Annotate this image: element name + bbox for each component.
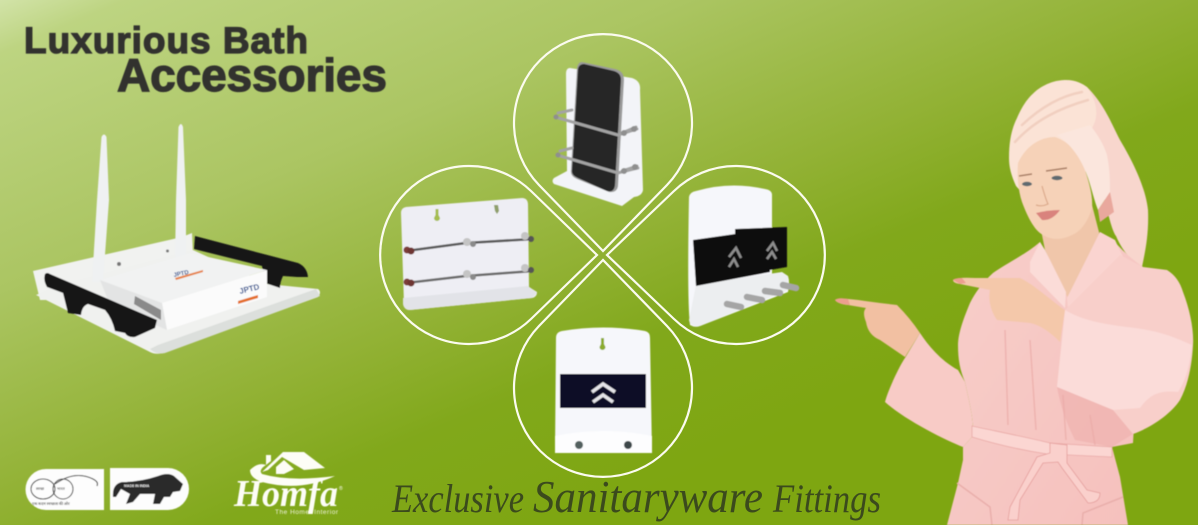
tray front lip shadow — [150, 289, 320, 354]
left black bracket — [44, 273, 157, 337]
word: Fittings: Fittings — [772, 476, 881, 521]
towel folds — [1015, 92, 1088, 142]
lower rail — [406, 271, 533, 283]
eye left — [1022, 182, 1032, 186]
slogan: Exclusive Sanitaryware Fittings — [391, 471, 881, 522]
vents — [134, 296, 161, 320]
black box — [693, 227, 787, 286]
chevrons right — [767, 243, 777, 259]
eye right — [1052, 176, 1062, 180]
phone screen — [572, 64, 621, 191]
slogan words right: भारत — [57, 486, 65, 492]
keyhole right — [494, 205, 499, 214]
upper rail — [555, 110, 637, 135]
orange strip — [238, 295, 258, 304]
product: phone holder — [552, 62, 643, 206]
lower shelf — [555, 431, 652, 453]
title: Luxurious Bath Accessories — [24, 20, 387, 101]
knob right — [624, 441, 632, 449]
knob left — [575, 441, 583, 449]
lips — [1036, 210, 1060, 220]
logo text on router: JPTD — [238, 282, 261, 296]
product: router stand — [33, 124, 320, 354]
right cuff — [1057, 310, 1192, 410]
right shoulder and sleeve — [1057, 255, 1193, 434]
towel inner wrap — [1057, 125, 1110, 210]
navy box — [560, 374, 646, 408]
word: Sanitaryware: Sanitaryware — [533, 471, 763, 522]
slogan strapline: एक कदम स्वच्छता की ओर — [32, 501, 70, 507]
holder plate — [552, 68, 643, 206]
petal right — [607, 166, 825, 344]
hooks — [727, 285, 796, 307]
white badge — [110, 468, 189, 510]
router side — [100, 280, 167, 330]
end fittings — [404, 232, 534, 286]
Homfa logo — [233, 452, 343, 516]
router front face — [162, 270, 267, 330]
lower rail — [557, 148, 638, 173]
lion text: MADE IN INDIA — [124, 484, 150, 488]
swoosh under house — [250, 464, 335, 486]
lower curve — [689, 272, 788, 326]
petal left — [380, 166, 597, 344]
holder plate — [555, 328, 652, 453]
spectacles icon — [31, 475, 98, 499]
petal top — [514, 34, 692, 251]
pocket left — [957, 483, 992, 525]
product: key holder with black box — [688, 185, 796, 327]
rail fittings — [554, 114, 638, 174]
lower hand — [835, 299, 920, 357]
panel: Make in India — [110, 468, 189, 510]
eyebrows — [1019, 168, 1067, 176]
left sleeve — [885, 333, 973, 447]
chevron icon — [592, 384, 615, 402]
title line 1: Luxurious Bath — [24, 20, 308, 61]
pocket right — [1082, 497, 1123, 525]
belt — [972, 426, 1112, 457]
white badge — [26, 469, 104, 510]
clover outline of four petals — [380, 34, 825, 477]
antenna right — [175, 124, 186, 262]
finger tip lower — [835, 298, 850, 305]
holder plate — [688, 185, 789, 327]
nose — [1036, 186, 1048, 206]
fingers shade — [953, 278, 966, 284]
right lapel — [1067, 232, 1123, 310]
woman in pink bathrobe — [835, 80, 1193, 525]
title line 2: Accessories — [117, 49, 387, 101]
brand name: Homfa — [233, 473, 338, 515]
face — [1018, 137, 1092, 239]
shadow below cuff — [1057, 387, 1133, 447]
upper rail — [406, 239, 533, 251]
neck — [1040, 205, 1101, 300]
belt knot and ties — [1008, 443, 1100, 520]
wall screws — [117, 250, 169, 266]
keyhole left — [434, 209, 440, 221]
top label text: JPTD — [173, 270, 190, 279]
product: phone pocket with chevrons — [555, 328, 652, 453]
towel turban — [1009, 80, 1096, 195]
registered mark: ® — [339, 485, 343, 492]
shelf lip — [403, 286, 537, 310]
router top — [100, 253, 267, 303]
upper hand — [953, 278, 1065, 342]
robe torso and body — [947, 232, 1143, 525]
tagline: The Home Interior — [275, 509, 339, 516]
right black bracket — [194, 236, 308, 288]
towel underside shade — [1098, 192, 1114, 222]
lion icon — [113, 474, 183, 504]
slogan words: स्वच्छ — [36, 486, 45, 492]
certification logos — [26, 468, 189, 510]
antenna left — [92, 134, 109, 282]
house roof icon — [262, 452, 325, 474]
phone frame — [571, 62, 624, 192]
tray back wall — [33, 233, 193, 300]
panel: Swachh Bharat — [26, 469, 104, 510]
petal bottom — [514, 260, 692, 477]
product: double rail shelf — [401, 198, 537, 310]
shelf plate — [401, 198, 537, 310]
keyhole — [600, 338, 606, 350]
towel tail — [1087, 87, 1148, 267]
tray floor — [36, 250, 320, 354]
top strip — [175, 270, 203, 280]
front label and top label — [173, 270, 261, 304]
left lapel — [1030, 242, 1066, 308]
chevrons left — [729, 248, 741, 267]
robe fold lines — [1005, 330, 1095, 445]
word: Exclusive: Exclusive — [391, 476, 524, 521]
